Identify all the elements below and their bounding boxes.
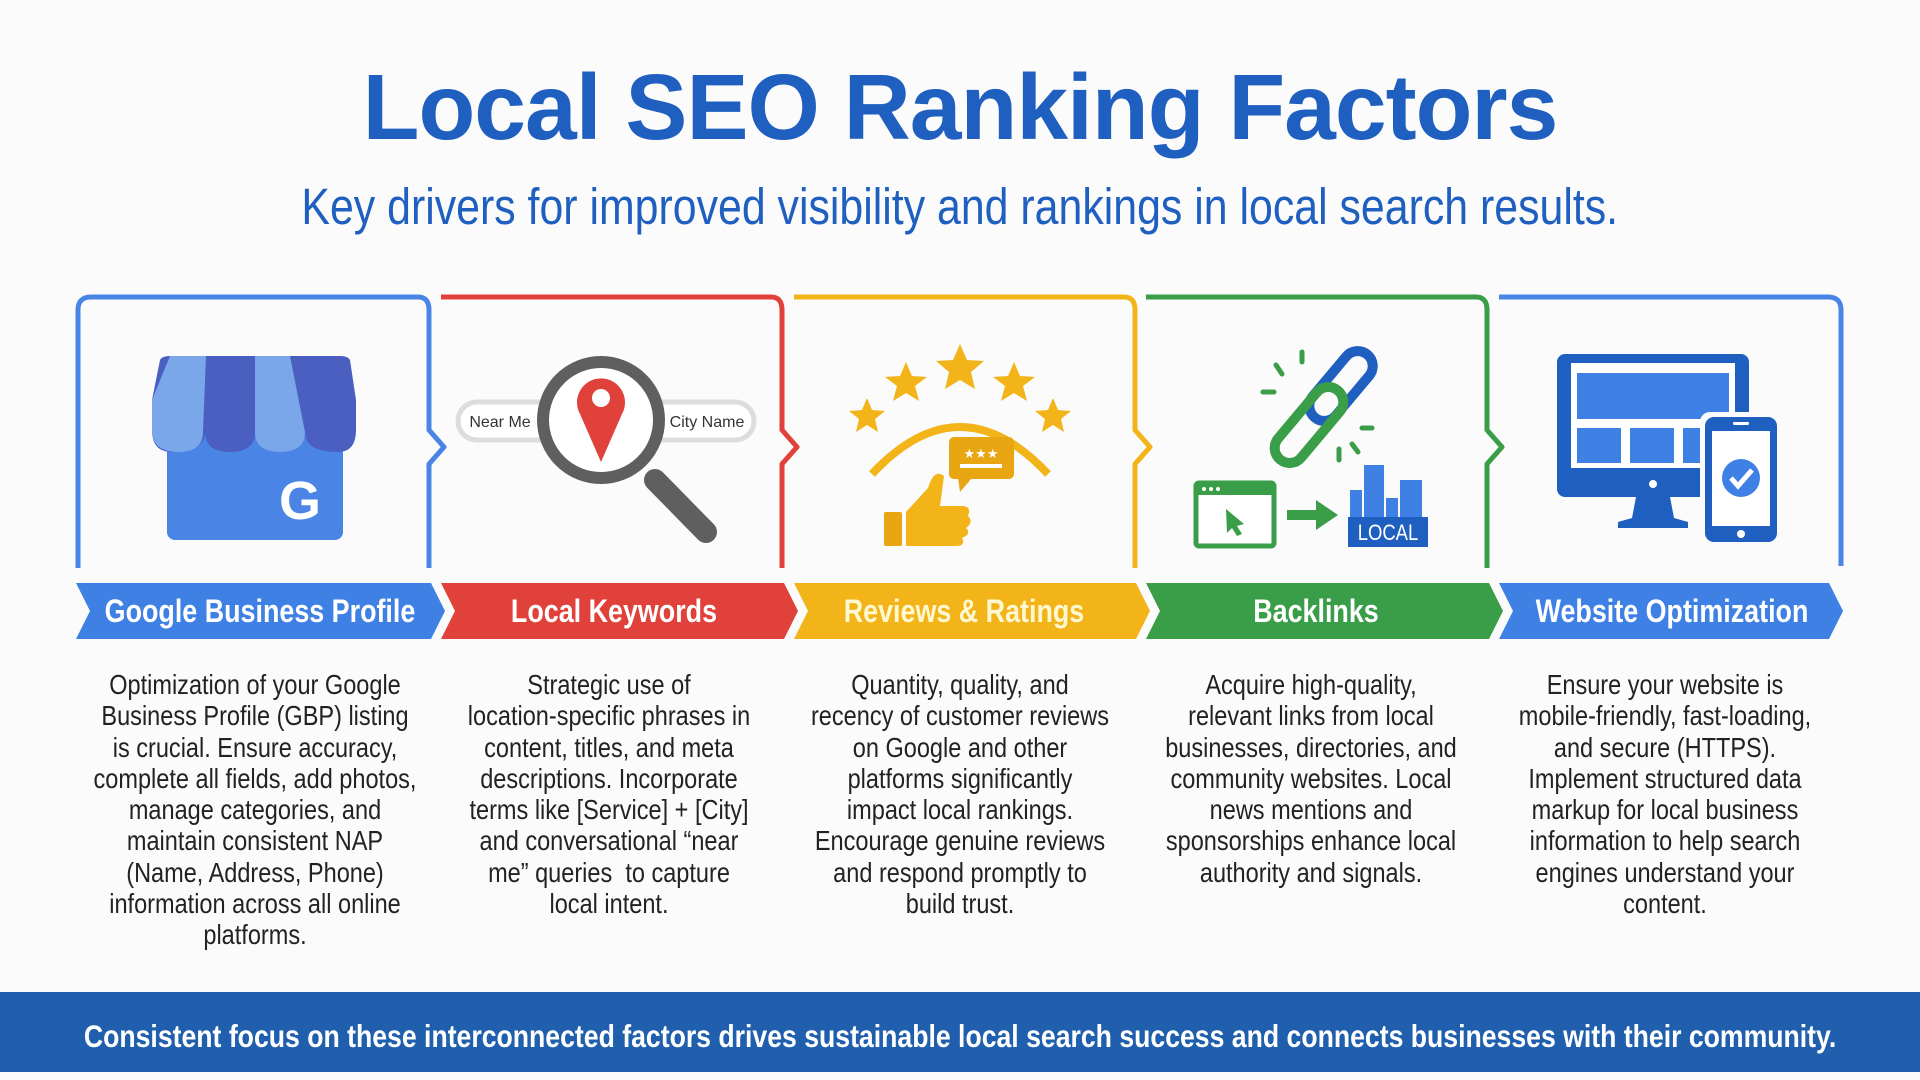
text: reviews: [811, 669, 1109, 919]
text: reviews: Quantity, quality, and: [851, 669, 1069, 700]
icon: reviews stars: ★★★: [964, 446, 998, 461]
panel frames: [78, 297, 1841, 568]
text: backlinks: Acquire high-quality,: [1205, 669, 1417, 700]
text: backlinks: news mentions and: [1210, 794, 1412, 825]
banner labels: Reviews & Ratings: [844, 594, 1084, 630]
text: website optimization: content.: [1623, 888, 1707, 919]
text: reviews: Encourage genuine reviews: [815, 825, 1105, 856]
banner labels: Website Optimization: [1536, 594, 1808, 630]
text: website optimization: information to help search: [1530, 825, 1800, 856]
footer banner: Consistent focus on these interconnected factors drives sustainable local search success and connects businesses with their community.: [84, 1018, 1836, 1054]
text: backlinks: sponsorships enhance local: [1166, 825, 1456, 856]
text: google business profile: Optimization of your Google: [109, 669, 401, 700]
banner labels: Backlinks: [1253, 594, 1379, 630]
text: google business profile: (Name, Address, Phone): [126, 857, 384, 888]
icon: backlinks: [1196, 345, 1428, 547]
text: backlinks: [1165, 669, 1457, 888]
text: local keywords: [468, 669, 750, 919]
text: google business profile: maintain consistent NAP: [127, 825, 383, 856]
icon: store: [152, 356, 356, 540]
text: local keywords: descriptions. Incorporate: [480, 763, 738, 794]
text: website optimization: [1519, 669, 1811, 919]
icon: magnifier search: Near Me: [469, 414, 531, 431]
text: backlinks: businesses, directories, and: [1165, 732, 1457, 763]
text: local keywords: local intent.: [550, 888, 668, 919]
text: reviews: on Google and other: [853, 732, 1067, 763]
text: website optimization: Implement structured data: [1528, 763, 1802, 794]
text: google business profile: complete all fields, add photos,: [94, 763, 416, 794]
icon: magnifier search: City Name: [670, 414, 744, 431]
text: reviews: build trust.: [906, 888, 1014, 919]
text: website optimization: mobile-friendly, fast-loading,: [1519, 700, 1811, 731]
text: reviews: recency of customer reviews: [811, 700, 1109, 731]
text: backlinks: community websites. Local: [1170, 763, 1452, 794]
text: local keywords: location-specific phrases in: [468, 700, 750, 731]
text: website optimization: Ensure your website is: [1547, 669, 1783, 700]
text: google business profile: information across all online: [109, 888, 401, 919]
text: reviews: and respond promptly to: [833, 857, 1087, 888]
text: google business profile: [94, 669, 416, 950]
text: local keywords: and conversational “near: [480, 825, 738, 856]
text: website optimization: engines understand your: [1536, 857, 1794, 888]
text: reviews: impact local rankings.: [847, 794, 1073, 825]
icon: magnifier search: [458, 362, 754, 532]
banners: [76, 583, 1843, 639]
icon: backlinks: LOCAL: [1358, 522, 1418, 545]
banner labels: [105, 594, 1808, 630]
text: reviews: platforms significantly: [848, 763, 1072, 794]
text: local keywords: me” queries to capture: [488, 857, 730, 888]
text: website optimization: markup for local business: [1532, 794, 1798, 825]
subtitle: Key drivers for improved visibility and rankings in local search results.: [302, 178, 1618, 235]
text: backlinks: relevant links from local: [1188, 700, 1434, 731]
banner labels: Google Business Profile: [105, 594, 415, 630]
text: google business profile: is crucial. Ensure accuracy,: [113, 732, 397, 763]
text: backlinks: authority and signals.: [1200, 857, 1422, 888]
icon: reviews stars: [849, 344, 1071, 546]
icon: store: G: [279, 471, 321, 531]
footer banner: [0, 992, 1920, 1072]
text: google business profile: platforms.: [203, 919, 307, 950]
text: google business profile: manage categories, and: [129, 794, 381, 825]
text: website optimization: and secure (HTTPS).: [1554, 732, 1776, 763]
text: google business profile: Business Profile (GBP) listing: [101, 700, 409, 731]
title: Local SEO Ranking Factors: [363, 55, 1557, 159]
icon: responsive devices: [1557, 354, 1782, 547]
banner labels: Local Keywords: [511, 594, 717, 630]
text: local keywords: content, titles, and meta: [484, 732, 734, 763]
text: local keywords: Strategic use of: [527, 669, 691, 700]
text: local keywords: terms like [Service] + [City]: [469, 794, 749, 825]
